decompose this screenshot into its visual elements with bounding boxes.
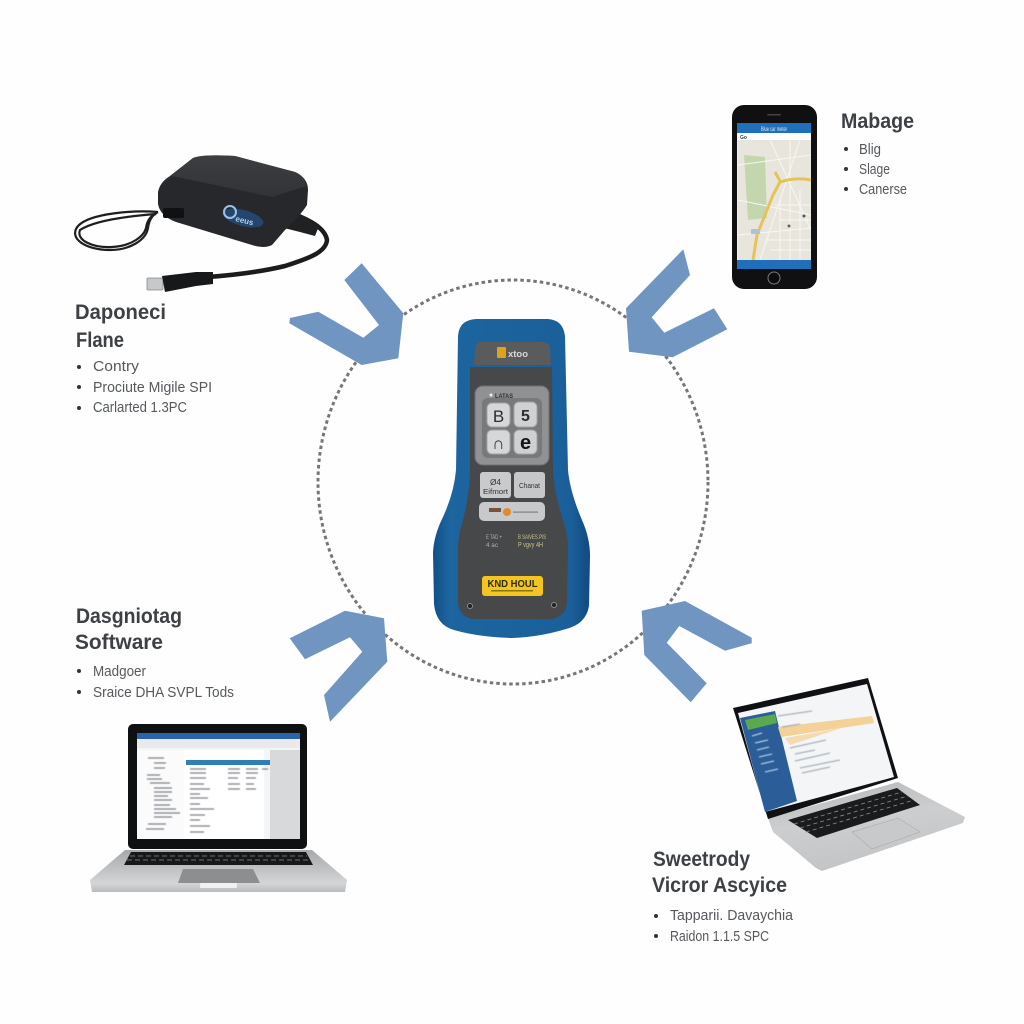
smartphone bullets: Blig bbox=[859, 141, 881, 158]
vehicle software text block bbox=[652, 848, 794, 945]
usb plug bbox=[147, 272, 213, 292]
smartphone bullets: Slage bbox=[859, 161, 890, 178]
yellow label bbox=[482, 576, 543, 596]
right laptop highlight bands bbox=[778, 716, 874, 737]
soft key left: Ø4 bbox=[490, 478, 502, 487]
adapter body bbox=[158, 155, 308, 247]
software bullets bbox=[77, 663, 234, 701]
device face panel bbox=[458, 367, 568, 619]
dotted circle bbox=[318, 280, 708, 684]
adapter device bbox=[75, 155, 327, 292]
soft key left bbox=[480, 472, 511, 498]
device top panel bbox=[474, 342, 551, 365]
smartphone bbox=[732, 105, 817, 289]
phone search row bbox=[737, 133, 811, 141]
adapter logo: eeus bbox=[235, 214, 255, 227]
vehicle software bullets: Tapparii. Davaychia bbox=[670, 907, 794, 924]
phone map bbox=[738, 140, 811, 260]
software heading: Dasgniotag bbox=[76, 605, 182, 628]
small print left: E TAD + bbox=[486, 534, 502, 541]
device blue housing bbox=[433, 319, 590, 638]
left laptop deck bbox=[90, 850, 347, 892]
adapter bullets: Prociute Migile SPI bbox=[93, 379, 212, 396]
left laptop screen bbox=[137, 733, 300, 839]
software heading bbox=[75, 605, 182, 654]
adapter logo bbox=[221, 205, 265, 231]
yellow label: KND HOUL bbox=[488, 579, 538, 590]
adapter top facet bbox=[163, 155, 306, 197]
smartphone heading: Mabage bbox=[841, 110, 914, 133]
arrow: bottom right bbox=[642, 601, 752, 702]
phone bottom bar bbox=[737, 260, 811, 269]
left laptop keyboard bbox=[124, 852, 313, 865]
adapter loop cable bbox=[75, 211, 158, 250]
soft key left: Eifmort bbox=[483, 489, 508, 496]
right laptop deck bbox=[768, 782, 965, 871]
vehicle software heading: Vicror Ascyice bbox=[652, 874, 787, 897]
small print right: P vgvy 4H bbox=[518, 542, 543, 549]
adapter output cable bbox=[208, 213, 327, 277]
key N: ∩ bbox=[492, 434, 505, 453]
device logo bbox=[497, 347, 529, 359]
arrow: top left bbox=[289, 263, 403, 365]
key 5: 5 bbox=[521, 408, 530, 425]
diagnostic software text block bbox=[75, 605, 234, 701]
adapter bullets bbox=[77, 358, 212, 416]
central handheld diagnostic device bbox=[433, 319, 590, 638]
right laptop screen bbox=[738, 684, 894, 812]
adapter heading: Flane bbox=[76, 329, 124, 352]
left laptop bezel bbox=[128, 724, 307, 849]
phone home button bbox=[768, 272, 780, 284]
software bullets: Madgoer bbox=[93, 663, 146, 680]
small print right: B SAIVES.PIS bbox=[518, 534, 546, 541]
vehicle software bullets: Raidon 1.1.5 SPC bbox=[670, 928, 769, 945]
keypad panel bbox=[475, 386, 549, 465]
left laptop trackpad bbox=[178, 869, 260, 883]
adapter bullets: Contry bbox=[93, 358, 140, 375]
arrow: bottom left bbox=[290, 611, 387, 722]
soft key right bbox=[514, 472, 545, 498]
adapter heading: Daponeci bbox=[75, 301, 166, 324]
vehicle software bullets bbox=[654, 907, 794, 945]
smartphone text block bbox=[841, 110, 914, 198]
phone top bar: Blue car meter bbox=[761, 127, 787, 133]
phone top bar bbox=[737, 123, 811, 133]
screws bbox=[468, 602, 556, 608]
software heading: Software bbox=[75, 631, 163, 654]
small print left bbox=[486, 534, 502, 549]
vehicle software heading: Sweetrody bbox=[653, 848, 750, 871]
status bar bbox=[479, 502, 545, 521]
vehicle software heading bbox=[652, 848, 787, 897]
phone body bbox=[732, 105, 817, 289]
arrow: top right bbox=[626, 249, 727, 357]
right laptop sidebar bbox=[740, 711, 797, 812]
key B: B bbox=[493, 407, 504, 426]
adapter strain relief bbox=[284, 208, 319, 236]
right laptop bezel bbox=[733, 678, 898, 819]
software bullets: Sraice DHA SVPL Tods bbox=[93, 684, 234, 701]
smartphone bullets: Canerse bbox=[859, 181, 907, 198]
right laptop keyboard bbox=[788, 788, 920, 838]
adapter text block bbox=[75, 301, 212, 416]
small print left: 4 ac bbox=[486, 542, 499, 549]
adapter usb port bbox=[163, 208, 184, 218]
keypad panel: LATAS bbox=[495, 394, 513, 400]
smartphone bullets bbox=[844, 141, 907, 198]
adapter bullets: Carlarted 1.3PC bbox=[93, 399, 187, 416]
device logo: xtoo bbox=[508, 349, 529, 359]
phone screen bbox=[737, 123, 811, 269]
adapter heading bbox=[75, 301, 166, 352]
small print right bbox=[518, 534, 546, 549]
right laptop trackpad bbox=[852, 818, 920, 849]
soft key right: Chanat bbox=[519, 483, 540, 490]
right laptop bbox=[733, 678, 965, 871]
phone search row: Go bbox=[740, 135, 747, 141]
key e: e bbox=[520, 432, 531, 454]
left laptop bbox=[90, 724, 347, 892]
